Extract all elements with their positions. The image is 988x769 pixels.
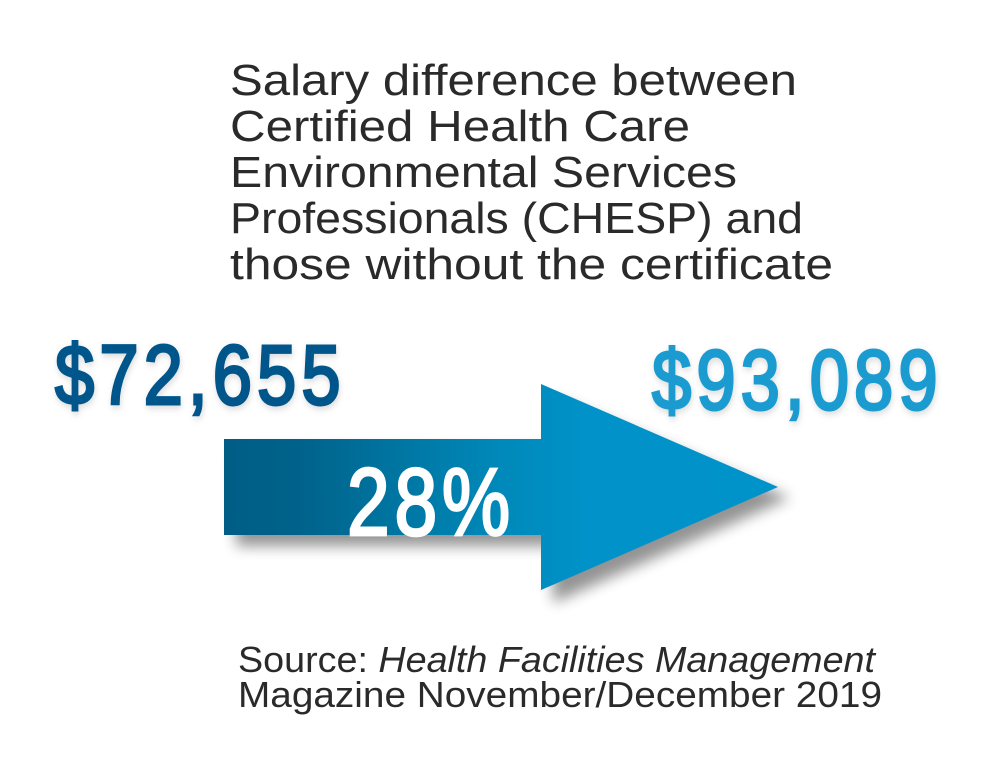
title: Salary difference between	[230, 56, 797, 105]
source: Magazine November/December 2019	[238, 674, 882, 715]
title: Environmental Services	[230, 148, 737, 197]
value: salary with certificate: $93,089	[652, 334, 938, 427]
title: Certified Health Care	[230, 102, 690, 151]
source	[238, 639, 882, 715]
value: salary without certificate: $72,655	[55, 329, 341, 422]
arrow	[224, 384, 790, 603]
title	[230, 56, 833, 289]
title: Professionals (CHESP) and	[230, 194, 803, 243]
percentage label: 28%	[347, 449, 510, 556]
source: Source: Health Facilities Management	[238, 639, 877, 680]
title: those without the certificate	[230, 240, 833, 289]
